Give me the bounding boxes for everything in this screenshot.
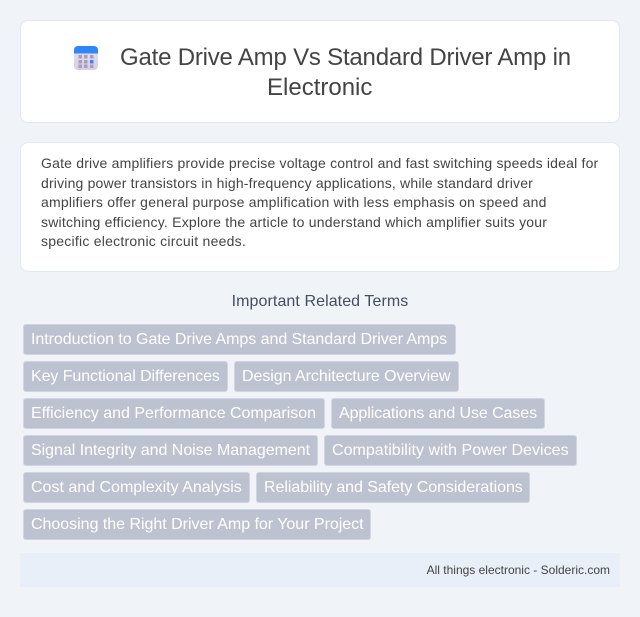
title: Gate Drive Amp Vs Standard Driver Amp in <box>120 44 571 71</box>
description text: specific electronic circuit needs. <box>41 233 246 249</box>
tag: Design Architecture Overview <box>242 368 450 385</box>
icon: calendar <box>74 46 98 70</box>
panel: title card <box>20 20 620 123</box>
footer: All things electronic - Solderic.com <box>427 563 610 577</box>
tag <box>324 435 577 466</box>
tag <box>23 361 228 392</box>
tag: Compatibility with Power Devices <box>332 442 569 459</box>
description text: switching efficiency. Explore the article to understand which amplifier suits your <box>41 214 547 230</box>
tag <box>23 398 325 429</box>
description text: driving power transistors in high-frequency applications, while standard driver <box>41 175 533 191</box>
tag <box>234 361 459 392</box>
tag <box>256 472 530 503</box>
panel: related term tags <box>23 324 577 540</box>
tag <box>23 472 250 503</box>
title: Electronic <box>267 74 372 101</box>
tag <box>23 509 371 540</box>
title <box>120 44 571 101</box>
tag: Reliability and Safety Considerations <box>264 479 523 496</box>
panel: description <box>20 142 620 272</box>
tag: Efficiency and Performance Comparison <box>31 405 316 422</box>
tag: Signal Integrity and Noise Management <box>31 442 310 459</box>
tag: Applications and Use Cases <box>339 405 537 422</box>
footer <box>20 553 620 587</box>
tag <box>331 398 545 429</box>
tag <box>23 324 456 355</box>
tag: Choosing the Right Driver Amp for Your Project <box>31 516 364 533</box>
tag: Introduction to Gate Drive Amps and Standard Driver Amps <box>31 331 447 348</box>
tag <box>23 435 318 466</box>
description text: Gate drive amplifiers provide precise voltage control and fast switching speeds ideal for <box>41 155 598 171</box>
description text: amplifiers offer general purpose amplification with less emphasis on speed and <box>41 194 547 210</box>
tag: Key Functional Differences <box>31 368 220 385</box>
heading: important related terms: Important Related Terms <box>232 293 408 310</box>
tag: Cost and Complexity Analysis <box>31 479 242 496</box>
description text <box>41 155 598 249</box>
